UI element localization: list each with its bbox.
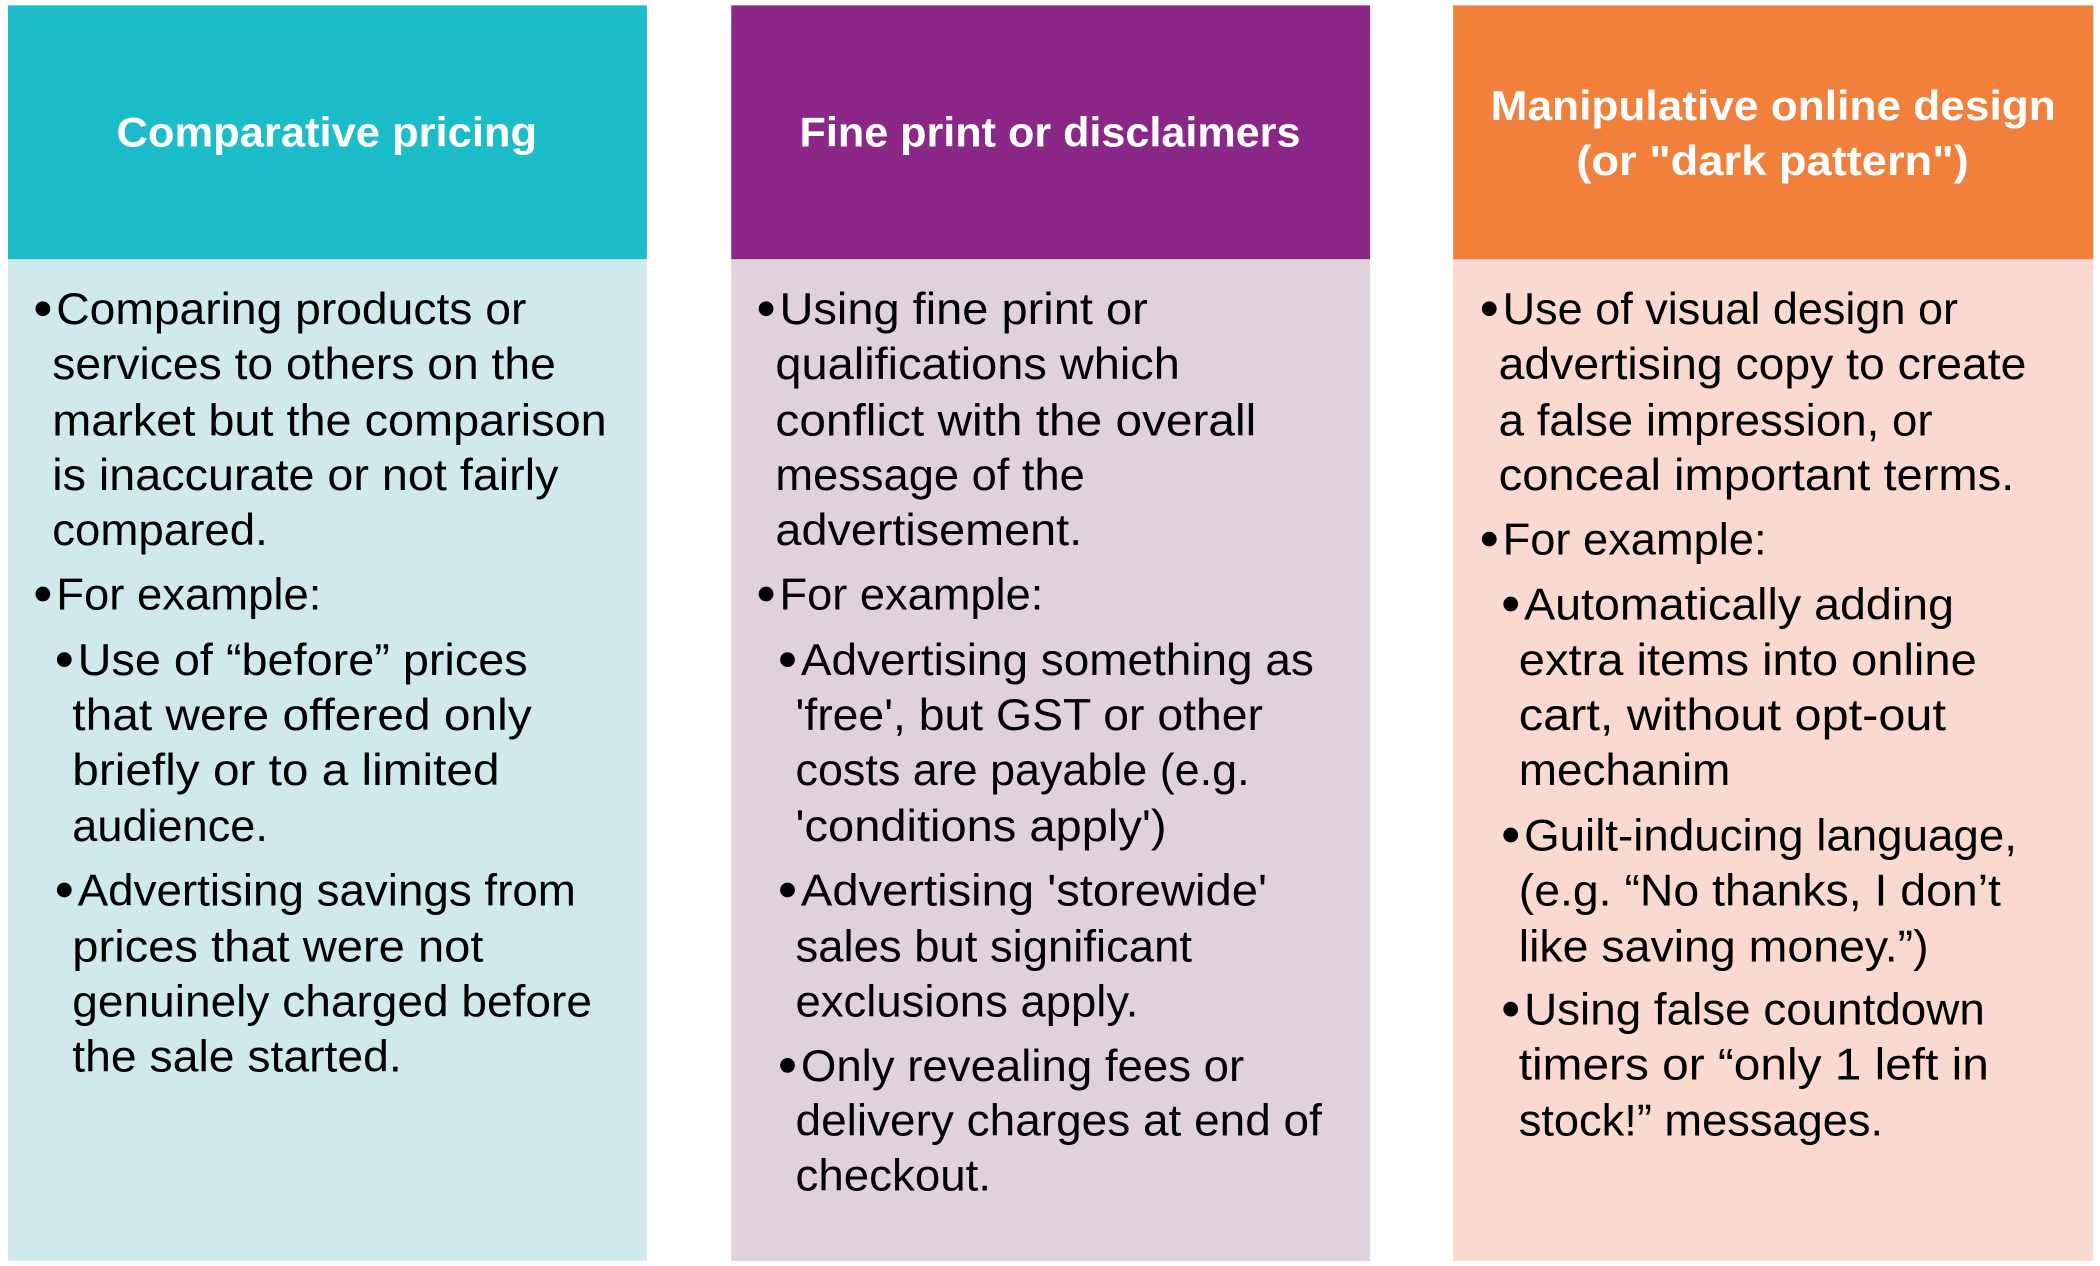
sub-bullet: free (780, 636, 1314, 851)
sub-bullet: guilt-inducing language: like saving money.”) (1519, 923, 1929, 972)
bullet: definition: conceal important terms. (1499, 451, 2014, 500)
bullet: for example: For example: (56, 570, 321, 619)
sub-bullet: before prices (57, 636, 532, 851)
sub-bullet: countdown timers: stock!” messages. (1519, 1097, 1883, 1146)
bullet: definition: message of the (775, 451, 1085, 500)
header band (731, 5, 1370, 259)
sub-bullet: extra items: Automatically adding (1524, 580, 1954, 629)
bullet: definition (759, 285, 1256, 555)
sub-bullet: free: costs are payable (e.g. (796, 746, 1250, 795)
sub-bullet: advertising savings: Advertising savings from (78, 866, 576, 915)
bullet: definition: a false impression, or (1499, 396, 1933, 445)
sub-bullet: fees: checkout. (796, 1152, 991, 1201)
sub-bullet: extra items: extra items into online (1519, 636, 1977, 685)
bullet: definition: compared. (52, 506, 268, 555)
heading (1491, 82, 2056, 184)
sub-bullet: storewide: sales but significant (796, 923, 1192, 972)
sub-bullet: countdown timers: Using false countdown (1524, 986, 1985, 1035)
heading: Comparative pricing (117, 109, 537, 156)
bullet: definition: qualifications which (775, 340, 1180, 389)
sub-bullet: storewide: Advertising 'storewide' (801, 866, 1267, 915)
bullet: definition: market but the comparison (52, 396, 607, 445)
header band (8, 5, 647, 259)
heading: Manipulative online design (1491, 82, 2056, 129)
sub-bullet: before prices: audience. (72, 802, 268, 851)
sub-bullet: fees: Only revealing fees or (801, 1042, 1244, 1091)
bullet: for example: For example: (1503, 515, 1767, 564)
bullet: definition: advertisement. (775, 506, 1082, 555)
panel body background (8, 258, 647, 1261)
bullet: definition (1482, 285, 2026, 500)
heading: Fine print or disclaimers (800, 109, 1300, 156)
sub-bullet: guilt-inducing language: Guilt-inducing language, (1524, 811, 2017, 860)
bullet: definition: Use of visual design or (1503, 285, 1958, 334)
sub-bullet: advertising savings (57, 866, 592, 1081)
bullet: definition: is inaccurate or not fairly (52, 451, 558, 500)
sub-bullet: guilt-inducing language (1503, 811, 2017, 972)
bullet: definition: advertising copy to create (1499, 340, 2026, 389)
sub-bullet: storewide: exclusions apply. (796, 978, 1138, 1027)
sub-bullet: countdown timers: timers or “only 1 left in (1519, 1040, 1989, 1089)
sub-bullet: fees: delivery charges at end of (796, 1097, 1323, 1146)
bullet: for example: For example: (779, 570, 1043, 619)
panel body background (1453, 258, 2093, 1261)
header band (1453, 5, 2093, 259)
bullet: definition: Using fine print or (779, 285, 1148, 334)
sub-bullet: before prices: that were offered only (72, 691, 532, 740)
sub-bullet: free: 'free', but GST or other (796, 691, 1263, 740)
sub-bullet: countdown timers (1503, 986, 1989, 1146)
panel body background (731, 258, 1370, 1261)
sub-bullet: free: Advertising something as (801, 636, 1314, 685)
sub-bullet: extra items: mechanim (1519, 746, 1730, 795)
sub-bullet: guilt-inducing language: (e.g. “No thanks, I don’t (1519, 866, 2001, 915)
sub-bullet: advertising savings: genuinely charged before (72, 978, 592, 1027)
sub-bullet: free: 'conditions apply') (796, 802, 1167, 851)
panel: fine print or disclaimers (731, 5, 1370, 1261)
bullet: definition (35, 285, 607, 555)
heading: (or "dark pattern") (1576, 137, 1969, 184)
bullet: definition: conflict with the overall (775, 396, 1256, 445)
sub-bullet: advertising savings: the sale started. (72, 1032, 402, 1081)
sub-bullet: fees (780, 1042, 1323, 1201)
sub-bullet: advertising savings: prices that were not (72, 923, 483, 972)
panel: manipulative online design (1453, 5, 2093, 1261)
sub-bullet: before prices: Use of “before” prices (78, 636, 528, 685)
sub-bullet: before prices: briefly or to a limited (72, 746, 500, 795)
sub-bullet: extra items: cart, without opt-out (1519, 691, 1946, 740)
sub-bullet: extra items (1503, 580, 1977, 795)
sub-bullet: storewide (780, 866, 1267, 1027)
bullet: definition: Comparing products or (56, 285, 526, 334)
bullet: definition: services to others on the (52, 340, 556, 389)
panel: comparative pricing (8, 5, 647, 1261)
